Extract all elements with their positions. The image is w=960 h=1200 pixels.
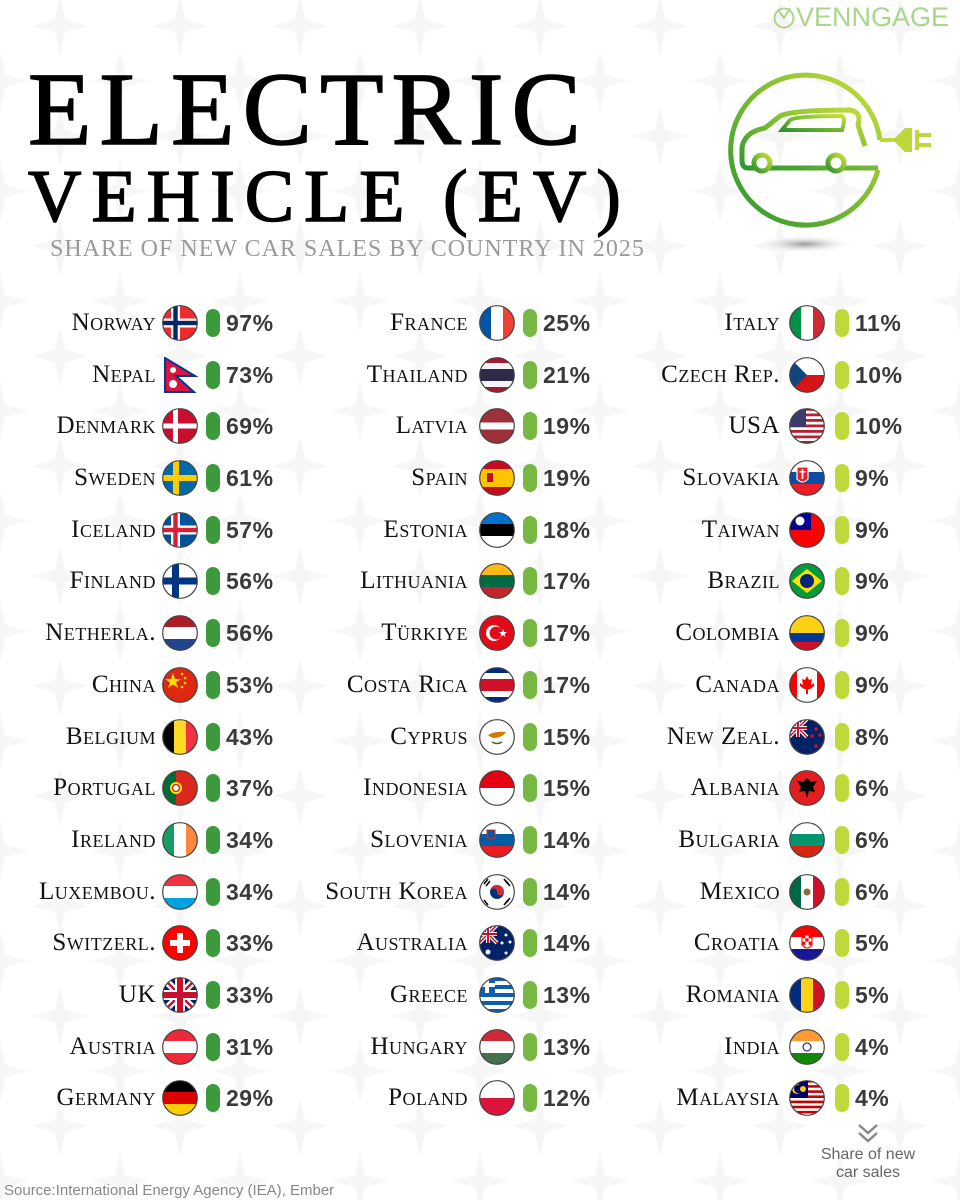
row: Finland: [70, 563, 274, 599]
row: Ireland: 34%: [226, 826, 274, 852]
row: Thailand: 21%: [543, 362, 591, 388]
row: Greece: [390, 977, 591, 1013]
row: Iceland: 57%: [226, 516, 274, 542]
row: Finland: 56%: [226, 568, 274, 594]
row: Italy: 11%: [855, 310, 901, 336]
row: Nepal: 73%: [226, 362, 274, 388]
title: [28, 52, 631, 238]
row: Lithuania: 17%: [543, 568, 591, 594]
row: France: 25%: [543, 310, 591, 336]
row: Germany: Germany: [56, 1084, 156, 1111]
row: Iceland: Iceland: [71, 516, 156, 543]
row: Sweden: [74, 460, 274, 496]
legend: share of new car sales: [821, 1124, 916, 1181]
row: Sweden: 61%: [226, 464, 274, 490]
row: New Zealand: 8%: [855, 724, 889, 750]
row: Costa Rica: [347, 667, 591, 703]
row: Latvia: Latvia: [396, 412, 468, 439]
row: Slovenia: [370, 822, 591, 858]
row: Sweden: Sweden: [74, 464, 156, 491]
row: Luxembourg: 34%: [226, 878, 274, 904]
row: Finland: Finland: [70, 567, 156, 594]
row: Nepal: [92, 357, 274, 393]
row: Luxembourg: Luxembou.: [39, 878, 156, 905]
row: Slovenia: 14%: [543, 826, 591, 852]
row: UK: UK: [119, 981, 156, 1008]
row: Albania: [690, 770, 889, 806]
title: VEHICLE (EV): [28, 156, 631, 238]
row: Slovakia: [682, 460, 889, 496]
row: Costa Rica: 17%: [543, 672, 591, 698]
row: Switzerland: [52, 925, 274, 961]
row: Czech Rep.: 10%: [855, 362, 903, 388]
row: Estonia: 18%: [543, 516, 591, 542]
column 1: [39, 305, 274, 1116]
row: France: [390, 305, 591, 341]
row: USA: 10%: [855, 412, 903, 438]
row: Mexico: Mexico: [700, 878, 780, 905]
row: Croatia: Croatia: [694, 929, 780, 956]
row: South Korea: South Korea: [325, 878, 468, 905]
row: Indonesia: [363, 770, 591, 806]
row: Canada: 9%: [855, 672, 889, 698]
row: Belgium: [66, 719, 274, 755]
logo: venngage: VENNGAGE: [796, 2, 949, 32]
row: Norway: [72, 305, 274, 341]
row: Canada: [695, 667, 889, 703]
row: Albania: 6%: [855, 774, 889, 800]
row: Greece: 13%: [543, 982, 591, 1008]
row: Costa Rica: Costa Rica: [347, 671, 468, 698]
row: UK: [119, 977, 274, 1013]
row: Denmark: 69%: [226, 412, 274, 438]
row: Netherlands: Netherla.: [45, 619, 156, 646]
source: Source:International Energy Agency (IEA), Ember: [4, 1182, 334, 1199]
row: Spain: Spain: [411, 464, 468, 491]
row: Hungary: [370, 1029, 591, 1065]
row: New Zealand: [667, 719, 889, 755]
row: Hungary: Hungary: [370, 1033, 468, 1060]
row: Italy: Italy: [724, 309, 780, 336]
subtitle: SHARE OF NEW CAR SALES BY COUNTRY IN 2025: [50, 236, 645, 262]
row: Bulgaria: [678, 822, 889, 858]
row: Cyprus: [390, 719, 591, 755]
icon: double chevron: [858, 1124, 878, 1142]
row: Taiwan: 9%: [855, 516, 889, 542]
row: Denmark: [56, 408, 274, 444]
row: Portugal: [53, 770, 274, 806]
row: Romania: [686, 977, 889, 1013]
row: India: 4%: [855, 1034, 889, 1060]
row: Cyprus: Cyprus: [390, 723, 468, 750]
row: Colombia: Colombia: [675, 619, 780, 646]
title: ELECTRIC: [28, 52, 589, 167]
row: Mexico: 6%: [855, 878, 889, 904]
row: Greece: Greece: [390, 981, 468, 1008]
row: Ireland: Ireland: [71, 826, 156, 853]
row: Netherlands: 56%: [226, 620, 274, 646]
row: Spain: [411, 460, 591, 496]
row: Norway: Norway: [72, 309, 156, 336]
row: Ireland: [71, 822, 274, 858]
row: South Korea: 14%: [543, 878, 591, 904]
row: Switzerland: Switzerl.: [52, 929, 156, 956]
row: China: China: [92, 671, 156, 698]
row: Cyprus: 15%: [543, 724, 591, 750]
row: Brazil: [707, 563, 889, 599]
row: Hungary: 13%: [543, 1034, 591, 1060]
row: Poland: 12%: [543, 1084, 591, 1110]
row: Croatia: 5%: [855, 930, 889, 956]
row: Belgium: 43%: [226, 724, 274, 750]
row: Taiwan: [702, 512, 889, 548]
row: Belgium: Belgium: [66, 723, 156, 750]
row: Türkiye: 17%: [543, 620, 591, 646]
row: South Korea: [325, 874, 591, 910]
column 3: [661, 305, 903, 1116]
row: Luxembourg: [39, 874, 274, 910]
row: Italy: [724, 305, 901, 341]
row: Portugal: Portugal: [53, 774, 156, 801]
row: Australia: Australia: [356, 929, 468, 956]
row: Poland: Poland: [388, 1084, 468, 1111]
row: Colombia: 9%: [855, 620, 889, 646]
row: Indonesia: 15%: [543, 774, 591, 800]
row: Colombia: [675, 615, 889, 651]
row: Norway: 97%: [226, 310, 274, 336]
row: Lithuania: Lithuania: [360, 567, 468, 594]
row: Romania: Romania: [686, 981, 780, 1008]
row: UK: 33%: [226, 982, 274, 1008]
row: India: [724, 1029, 889, 1065]
row: Germany: [56, 1080, 274, 1116]
row: Malaysia: 4%: [855, 1084, 889, 1110]
row: Mexico: [700, 874, 889, 910]
row: Austria: 31%: [226, 1034, 274, 1060]
row: Romania: 5%: [855, 982, 889, 1008]
row: Czech Rep.: Czech Rep.: [661, 361, 780, 388]
row: Latvia: [396, 408, 591, 444]
row: Portugal: 37%: [226, 774, 274, 800]
row: Türkiye: Türkiye: [381, 619, 468, 646]
row: Estonia: [384, 512, 591, 548]
row: Albania: Albania: [690, 774, 780, 801]
row: Lithuania: [360, 563, 591, 599]
row: Spain: 19%: [543, 464, 591, 490]
row: Germany: 29%: [226, 1084, 274, 1110]
column 2: [325, 305, 591, 1116]
row: Slovakia: 9%: [855, 464, 889, 490]
row: Taiwan: Taiwan: [702, 516, 780, 543]
row: China: [92, 667, 274, 703]
row: Canada: Canada: [695, 671, 780, 698]
row: Croatia: [694, 925, 889, 961]
row: China: 53%: [226, 672, 274, 698]
row: Nepal: Nepal: [92, 361, 156, 388]
row: India: India: [724, 1033, 780, 1060]
icon: electric car in circle: [728, 72, 931, 250]
row: Slovakia: Slovakia: [682, 464, 780, 491]
row: Brazil: Brazil: [707, 567, 780, 594]
row: Türkiye: [381, 615, 591, 651]
row: Latvia: 19%: [543, 412, 591, 438]
row: New Zealand: New Zeal.: [667, 723, 780, 750]
row: Austria: [69, 1029, 274, 1065]
row: Czech Rep.: [661, 357, 903, 393]
row: Thailand: [367, 357, 591, 393]
row: Australia: [356, 925, 591, 961]
row: France: France: [390, 309, 468, 336]
row: Brazil: 9%: [855, 568, 889, 594]
legend: share of new car sales: car sales: [836, 1164, 900, 1181]
row: USA: [728, 408, 903, 444]
row: Thailand: Thailand: [367, 361, 468, 388]
row: Malaysia: Malaysia: [676, 1084, 780, 1111]
row: Denmark: Denmark: [56, 412, 156, 439]
row: Iceland: [71, 512, 274, 548]
row: Bulgaria: 6%: [855, 826, 889, 852]
row: USA: USA: [728, 412, 780, 439]
legend: share of new car sales: Share of new: [821, 1146, 915, 1163]
row: Malaysia: [676, 1080, 889, 1116]
row: Netherlands: [45, 615, 274, 651]
row: Bulgaria: Bulgaria: [678, 826, 780, 853]
row: Estonia: Estonia: [384, 516, 468, 543]
row: Slovenia: Slovenia: [370, 826, 468, 853]
row: Austria: Austria: [69, 1033, 156, 1060]
row: Australia: 14%: [543, 930, 591, 956]
row: Poland: [388, 1080, 591, 1116]
row: Switzerland: 33%: [226, 930, 274, 956]
row: Indonesia: Indonesia: [363, 774, 468, 801]
